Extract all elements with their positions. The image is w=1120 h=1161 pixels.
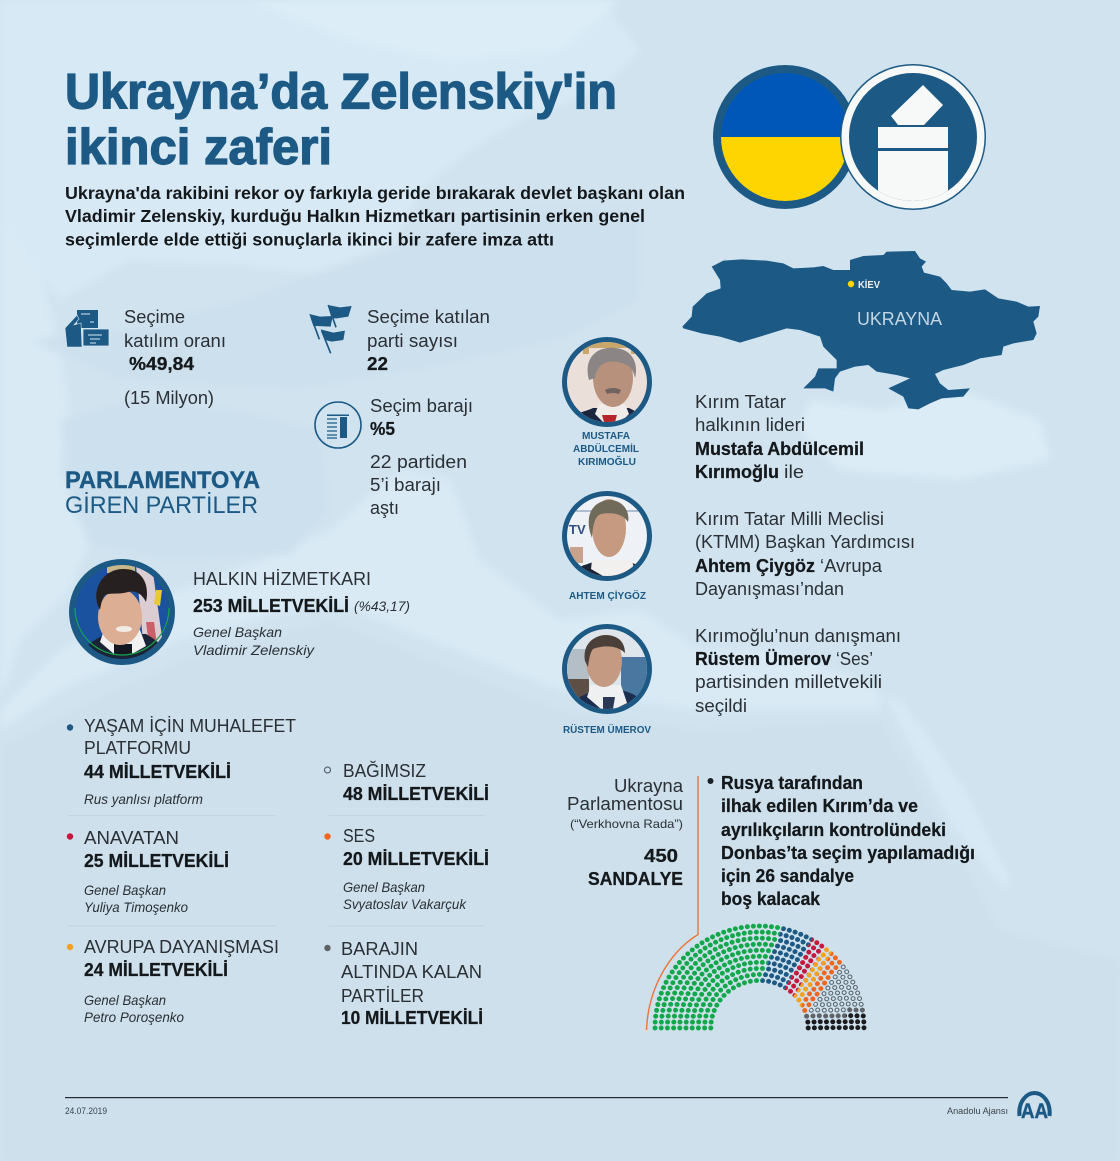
- text: Çiygöz: (KTMM) Başkan Yardımcısı: [695, 532, 915, 552]
- source: Anadolu Ajansı: [947, 1106, 1008, 1117]
- text: Çiygöz: ‘Avrupa: [820, 556, 883, 576]
- icon: flags: [309, 305, 352, 353]
- stat: parties: Seçime katılan: [367, 307, 490, 327]
- stat: threshold: [315, 396, 473, 518]
- label: Ukrainian parliament: 450: [644, 846, 678, 866]
- stat: threshold: Seçim barajı: [370, 396, 473, 416]
- label: Ukrainian parliament: [567, 776, 684, 889]
- logo: Anadolu Ajansı: AA: [1021, 1100, 1048, 1123]
- party: Ses: Genel Başkan: [343, 879, 425, 895]
- party: Ses: SES: [343, 826, 375, 846]
- intro text: seçimlerde elde ettiği sonuçlarla ikinci bir zafere imza attı: [65, 230, 554, 250]
- text: Ümerov: [695, 626, 901, 716]
- text: Çiygöz: Ahtem Çiygöz: [695, 556, 815, 576]
- text: Ümerov: Rüstem Ümerov: [695, 649, 831, 669]
- note: vacant seats: boş kalacak: [721, 889, 821, 909]
- photo: Zelenskiy: [69, 559, 175, 665]
- party: Anavatan: [67, 828, 229, 915]
- text: Kırımoğlu: ile: [784, 462, 804, 482]
- stat: threshold: 22 partiden: [370, 452, 467, 472]
- photo: Rüstem Ümerov: [562, 624, 652, 714]
- note: vacant seats: için 26 sandalye: [721, 866, 854, 886]
- date: 24.07.2019: [65, 1106, 107, 1116]
- parliament seat chart: [655, 926, 864, 1028]
- party: Avrupa Dayanışması: Genel Başkan: [84, 992, 166, 1008]
- note: vacant seats: Donbas’ta seçim yapılamadığı: [721, 843, 975, 863]
- logo: Anadolu Ajansı: [1019, 1093, 1050, 1123]
- stat: parties: parti sayısı: [367, 331, 458, 351]
- note: vacant seats: ilhak edilen Kırım’da ve: [721, 796, 918, 816]
- text: Çiygöz: Kırım Tatar Milli Meclisi: [695, 509, 884, 529]
- photo: Mustafa Abdülcemil Kırımoğlu: [562, 337, 652, 427]
- party: Anavatan: ANAVATAN: [84, 828, 179, 848]
- party: below threshold: 10 MİLLETVEKİLİ: [341, 1008, 483, 1028]
- heading: parties in parliament: PARLAMENTOYA: [65, 467, 260, 494]
- heading: parties in parliament: [65, 467, 260, 519]
- label: Ukrainian parliament: SANDALYE: [588, 869, 683, 889]
- map: Ukraine: [682, 251, 1040, 409]
- text: Ümerov: seçildi: [695, 696, 747, 716]
- icon: Ukrainian flag: [713, 65, 857, 209]
- stat: parties: 22: [367, 354, 388, 374]
- leader line: [646, 776, 698, 1030]
- caption: Ahtem Çiygöz: AHTEM ÇİYGÖZ: [569, 589, 647, 602]
- title: ikinci zaferi: [65, 119, 332, 175]
- caption: Mustafa Abdülcemil Kırımoğlu: MUSTAFA: [582, 430, 630, 442]
- intro text: [65, 183, 685, 250]
- photo: Ahtem Çiygöz: TV: [569, 522, 586, 537]
- intro text: Vladimir Zelenskiy, kurduğu Halkın Hizmetkarı partisinin erken genel: [65, 206, 645, 226]
- party: Ses: [324, 826, 489, 912]
- label: Ukrainian parliament: (“Verkhovna Rada”): [570, 817, 683, 831]
- text: Kırımoğlu: Mustafa Abdülcemil: [695, 439, 864, 459]
- party: Avrupa Dayanışması: 24 MİLLETVEKİLİ: [84, 960, 228, 980]
- party: Bağımsız: BAĞIMSIZ: [343, 760, 426, 781]
- party: Bağımsız: [324, 760, 489, 804]
- Kiev marker: KİEV: [858, 278, 880, 291]
- party: Yaşam İçin Muhalefet Platformu: Rus yanlısı platform: [84, 791, 203, 807]
- text: Kırımoğlu: Kırımoğlu: [695, 462, 779, 482]
- stat: turnout: %49,84: [129, 354, 194, 374]
- icon: ballot box: [840, 64, 986, 211]
- party: Avrupa Dayanışması: Petro Poroşenko: [84, 1009, 184, 1025]
- block: Halkın Hizmetkarı: Genel Başkan: [193, 624, 282, 640]
- party: below threshold: ALTINDA KALAN: [341, 962, 482, 982]
- text: Kırımoğlu: [695, 392, 864, 482]
- stat: threshold: 5’i barajı: [370, 475, 441, 495]
- party: Bağımsız: 48 MİLLETVEKİLİ: [343, 784, 489, 804]
- party: below threshold: BARAJIN: [341, 939, 418, 959]
- text: Kırımoğlu: halkının lideri: [695, 415, 805, 435]
- text: Çiygöz: [695, 509, 915, 599]
- party: Yaşam İçin Muhalefet Platformu: PLATFORMU: [84, 738, 191, 758]
- party: Yaşam İçin Muhalefet Platformu: YAŞAM İÇİN MUHALEFET: [84, 716, 296, 736]
- photo: Ahtem Çiygöz: [562, 491, 652, 581]
- caption: Mustafa Abdülcemil Kırımoğlu: [573, 430, 640, 468]
- party: Ses: 20 MİLLETVEKİLİ: [343, 849, 489, 869]
- party: below threshold: [324, 939, 483, 1028]
- footer rule: [65, 1097, 1008, 1098]
- block: Halkın Hizmetkarı: 253 MİLLETVEKİLİ: [193, 596, 349, 616]
- caption: Mustafa Abdülcemil Kırımoğlu: KIRIMOĞLU: [578, 455, 636, 468]
- note: vacant seats: Rusya tarafından: [721, 773, 863, 793]
- stat: parties: [309, 305, 490, 374]
- note: vacant seats: [708, 773, 975, 909]
- label: Ukrainian parliament: Parlamentosu: [567, 794, 683, 814]
- party: Anavatan: Genel Başkan: [84, 882, 166, 898]
- text: Kırımoğlu: Kırım Tatar: [695, 392, 786, 412]
- block: Halkın Hizmetkarı: Vladimir Zelenskiy: [193, 642, 315, 658]
- block: Halkın Hizmetkarı: [193, 569, 410, 658]
- stat: turnout: (15 Milyon): [124, 388, 214, 408]
- party: Avrupa Dayanışması: AVRUPA DAYANIŞMASI: [84, 937, 279, 957]
- party: Anavatan: 25 MİLLETVEKİLİ: [84, 851, 229, 871]
- party: Ses: Svyatoslav Vakarçuk: [343, 896, 467, 912]
- party: Yaşam İçin Muhalefet Platformu: 44 MİLLETVEKİLİ: [84, 762, 231, 782]
- heading: parties in parliament: GİREN PARTİLER: [65, 492, 258, 519]
- stat: turnout: [65, 307, 226, 408]
- stat: turnout: katılım oranı: [124, 331, 226, 351]
- icon: voting hand: [65, 310, 109, 347]
- icon: threshold gauge: [315, 402, 361, 448]
- stat: threshold: %5: [370, 419, 395, 439]
- party: Avrupa Dayanışması: [67, 937, 279, 1025]
- block: Halkın Hizmetkarı: (%43,17): [354, 598, 410, 614]
- party: below threshold: PARTİLER: [341, 986, 424, 1006]
- stat: threshold: aştı: [370, 498, 399, 518]
- note: vacant seats: ayrılıkçıların kontrolündeki: [721, 820, 946, 840]
- caption: Rüstem Ümerov: RÜSTEM ÜMEROV: [563, 723, 651, 736]
- title: [65, 64, 617, 175]
- text: Çiygöz: Dayanışması’ndan: [695, 579, 844, 599]
- text: Ümerov: ‘Ses’: [836, 649, 873, 669]
- stat: turnout: Seçime: [124, 307, 185, 327]
- party: Yaşam İçin Muhalefet Platformu: [67, 716, 296, 807]
- party: Anavatan: Yuliya Timoşenko: [84, 899, 188, 915]
- caption: Mustafa Abdülcemil Kırımoğlu: ABDÜLCEMİL: [573, 442, 640, 455]
- title: Ukrayna’da Zelenskiy'in: [65, 64, 617, 120]
- text: Ümerov: Kırımoğlu’nun danışmanı: [695, 626, 901, 646]
- label: Ukrainian parliament: Ukrayna: [614, 776, 684, 796]
- Ukraine label: UKRAYNA: [857, 309, 942, 329]
- intro text: Ukrayna'da rakibini rekor oy farkıyla geride bırakarak devlet başkanı olan: [65, 183, 685, 203]
- Kiev marker: [848, 278, 880, 291]
- block: Halkın Hizmetkarı: HALKIN HİZMETKARI: [193, 569, 371, 589]
- text: Ümerov: partisinden milletvekili: [695, 672, 882, 692]
